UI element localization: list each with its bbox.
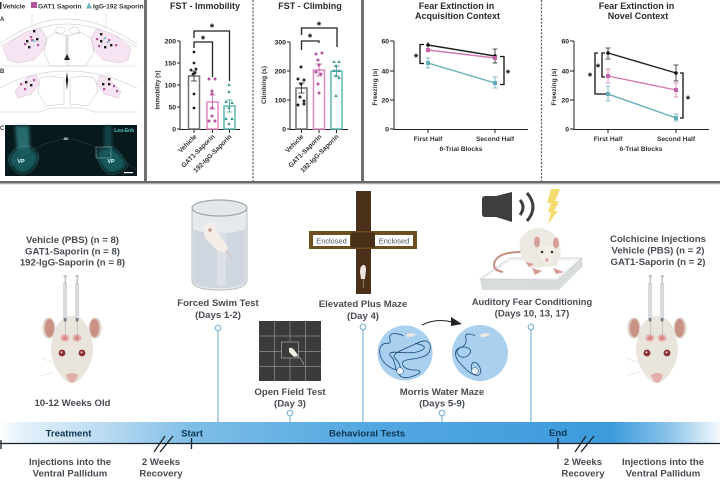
text: elevated plus maze <box>319 299 407 322</box>
x axis labels: First Half <box>414 136 443 143</box>
timeline notes: Ventral Pallidum <box>626 468 700 480</box>
IgG line <box>426 58 498 88</box>
legend: treatment groups: IgG-192 Saporin <box>93 3 144 10</box>
timeline pins <box>215 324 534 422</box>
y axis ticks: 100 <box>275 98 286 104</box>
y axis ticks: 40 <box>381 68 389 76</box>
y axis label: Freezing (s) <box>372 68 379 106</box>
panel C: fluorescence micrograph <box>0 125 137 176</box>
GAT1 line <box>606 69 678 97</box>
text: auditory fear conditioning: (Days 10, 13, 17) <box>495 308 569 320</box>
icon: lightning bolt <box>547 189 560 224</box>
text: surgery groups: GAT1-Saporin (n = 8) <box>25 246 120 258</box>
icon: swimming mouse <box>203 223 232 258</box>
text: forced swim test: (Days 1-2) <box>195 310 241 321</box>
arrow: trial progression <box>422 317 462 326</box>
y axis ticks: 0 <box>565 126 569 134</box>
text: auditory fear conditioning <box>472 297 592 320</box>
text: open field test <box>254 387 326 410</box>
legend: treatment groups: Vehicle <box>2 3 26 10</box>
y axis ticks: 20 <box>381 98 389 104</box>
icon: mouse in arena <box>289 348 304 365</box>
timeline notes: 2 Weeks <box>564 457 602 468</box>
significance brackets <box>414 44 511 84</box>
timeline notes: Recovery <box>139 468 183 480</box>
IgG line <box>606 86 678 121</box>
timeline band <box>0 422 720 443</box>
timeline axis <box>0 438 720 449</box>
y axis label: Immobility (s) <box>156 70 162 110</box>
timeline phase labels: Start <box>181 428 204 440</box>
label: ventral pallidum left: VP <box>17 159 25 165</box>
legend: treatment groups: GAT1 Saporin <box>38 3 81 10</box>
heading: Fear Extinction in <box>419 1 494 11</box>
timeline notes: 2 Weeks <box>142 457 180 468</box>
vehicle line <box>426 42 498 63</box>
significance brackets: * <box>506 68 511 80</box>
label: ventral pallidum right: VP <box>107 159 115 165</box>
icon: conditioning chamber with rat <box>480 228 583 290</box>
text: age: 10-12 Weeks Old <box>34 398 111 409</box>
icon: speaker <box>482 192 533 222</box>
group labels: GAT1-Saporin <box>287 133 323 169</box>
significance brackets: * <box>210 22 215 34</box>
y axis ticks <box>381 38 389 134</box>
text: elevated plus maze: (Day 4) <box>347 311 379 322</box>
x axis labels: First Half <box>594 136 623 143</box>
y axis ticks: 200 <box>275 68 286 76</box>
icon: elevated plus maze <box>309 191 417 294</box>
icon: forced swim beaker <box>192 200 247 290</box>
text: elevated plus maze: Elevated Plus Maze <box>319 299 407 310</box>
icon: mouse on open arm <box>360 265 366 288</box>
label: enclosed right: Enclosed <box>379 236 409 245</box>
heading: FST - Immobility <box>170 1 240 11</box>
icon: rat <box>494 228 564 275</box>
data points <box>190 51 197 109</box>
vehicle line <box>606 48 678 81</box>
x axis labels <box>414 136 515 153</box>
y axis ticks: 0 <box>385 126 389 134</box>
x axis labels: Second Half <box>476 136 515 143</box>
icon: Morris water maze early trial <box>378 326 432 380</box>
icon: swimming mouse <box>406 333 416 337</box>
text: forced swim test <box>177 298 259 321</box>
text: Morris water maze: Morris Water Maze <box>400 387 484 398</box>
label: section A: A <box>0 17 5 23</box>
text: forced swim test: Forced Swim Test <box>177 298 259 309</box>
text: colchicine groups: Colchicine Injections <box>610 234 706 245</box>
timeline phase labels: Treatment <box>46 428 92 440</box>
timeline notes <box>29 457 704 480</box>
icon: Morris water maze late trial <box>452 325 508 381</box>
text: Morris water maze <box>400 387 484 410</box>
group labels: Vehicle <box>284 133 306 154</box>
y axis label: Climbing (s) <box>261 66 268 104</box>
timeline notes: Injections into the <box>622 457 704 468</box>
significance brackets <box>302 20 337 50</box>
timeline phase labels: Behavioral Tests <box>329 428 405 440</box>
text: surgery groups: 192-IgG-Saporin (n = 8) <box>20 258 125 268</box>
text: surgery groups: Vehicle (PBS) (n = 8) <box>26 235 119 246</box>
timeline notes: Recovery <box>561 468 605 480</box>
heading: Fear Extinction in <box>599 1 674 11</box>
legend: treatment groups <box>0 2 144 10</box>
y axis ticks: 60 <box>561 38 569 46</box>
brain section A with injection sites <box>0 14 137 66</box>
bars <box>296 70 342 129</box>
y axis ticks: 0 <box>172 126 176 134</box>
y axis ticks: 40 <box>561 68 569 76</box>
icon: swimming mouse <box>480 333 490 337</box>
text: Morris water maze: (Days 5-9) <box>419 398 465 410</box>
heading: Acquisition Context <box>415 11 500 21</box>
group labels: 192-IgG-Saporin <box>192 133 233 174</box>
chart: FST immobility <box>156 1 240 174</box>
y axis ticks: 0 <box>282 126 286 134</box>
significance brackets <box>588 53 691 118</box>
label: stain: Leu-Enk <box>114 128 134 134</box>
icon: mouse with colchicine injections <box>626 276 686 383</box>
significance brackets: * <box>308 32 313 44</box>
x axis labels: 6-Trial Blocks <box>620 146 663 153</box>
group labels: GAT1-Saporin <box>180 133 216 169</box>
heading: Novel Context <box>608 11 668 21</box>
y axis label: Freezing (s) <box>551 68 558 106</box>
significance brackets <box>194 22 230 81</box>
chart: fear extinction acquisition context <box>372 1 528 153</box>
y axis ticks <box>275 40 286 134</box>
text: open field test: Open Field Test <box>254 387 326 398</box>
group labels: 192-IgG-Saporin <box>299 133 340 174</box>
label: section B: B <box>0 69 5 75</box>
timeline notes: Ventral Pallidum <box>33 468 107 480</box>
brain section B with injection sites <box>0 71 137 112</box>
text: open field test: (Day 3) <box>274 398 306 410</box>
panel: histology injection sites <box>0 2 144 176</box>
x axis labels: 6-Trial Blocks <box>440 146 483 153</box>
recovery break marks <box>154 436 594 452</box>
icon: mouse with bilateral injections <box>41 276 102 383</box>
heading: FST - Climbing <box>278 1 342 11</box>
significance brackets: * <box>686 94 691 106</box>
text: colchicine groups: Vehicle (PBS) (n = 2) <box>611 246 705 256</box>
y axis ticks: 50 <box>168 104 176 112</box>
GAT1 line <box>426 47 497 60</box>
y axis ticks: 150 <box>165 60 176 68</box>
icon: open field arena <box>259 321 321 381</box>
significance brackets: * <box>414 52 419 64</box>
text: colchicine groups: GAT1-Saporin (n = 2) <box>611 257 705 268</box>
y axis ticks: 300 <box>275 40 286 46</box>
y axis ticks: 100 <box>165 82 176 90</box>
y axis ticks <box>561 38 569 134</box>
timeline notes: Injections into the <box>29 457 111 468</box>
significance brackets: * <box>201 34 206 46</box>
data points <box>296 66 306 106</box>
y axis ticks: 200 <box>165 38 176 46</box>
timeline phase labels <box>46 428 567 440</box>
x axis labels: Second Half <box>657 136 696 143</box>
bars <box>188 76 235 129</box>
text: auditory fear conditioning: Auditory Fear Conditioning <box>472 297 592 307</box>
panel C: fluorescence micrograph: C <box>0 126 5 132</box>
text: colchicine groups <box>610 234 706 268</box>
significance brackets: * <box>317 20 322 32</box>
text: surgery groups <box>20 235 125 268</box>
label: enclosed left: Enclosed <box>316 236 347 245</box>
y axis ticks: 20 <box>561 98 569 104</box>
chart: fear extinction novel context <box>551 1 709 153</box>
significance brackets: * <box>596 62 601 74</box>
chart: FST climbing <box>261 1 348 174</box>
significance brackets: * <box>588 71 593 83</box>
label: ac: ac <box>63 136 69 141</box>
group labels: Vehicle <box>177 133 199 154</box>
x axis labels <box>594 136 696 153</box>
y axis ticks: 60 <box>381 38 389 46</box>
y axis ticks <box>165 38 176 134</box>
timeline phase labels: End <box>549 428 567 439</box>
